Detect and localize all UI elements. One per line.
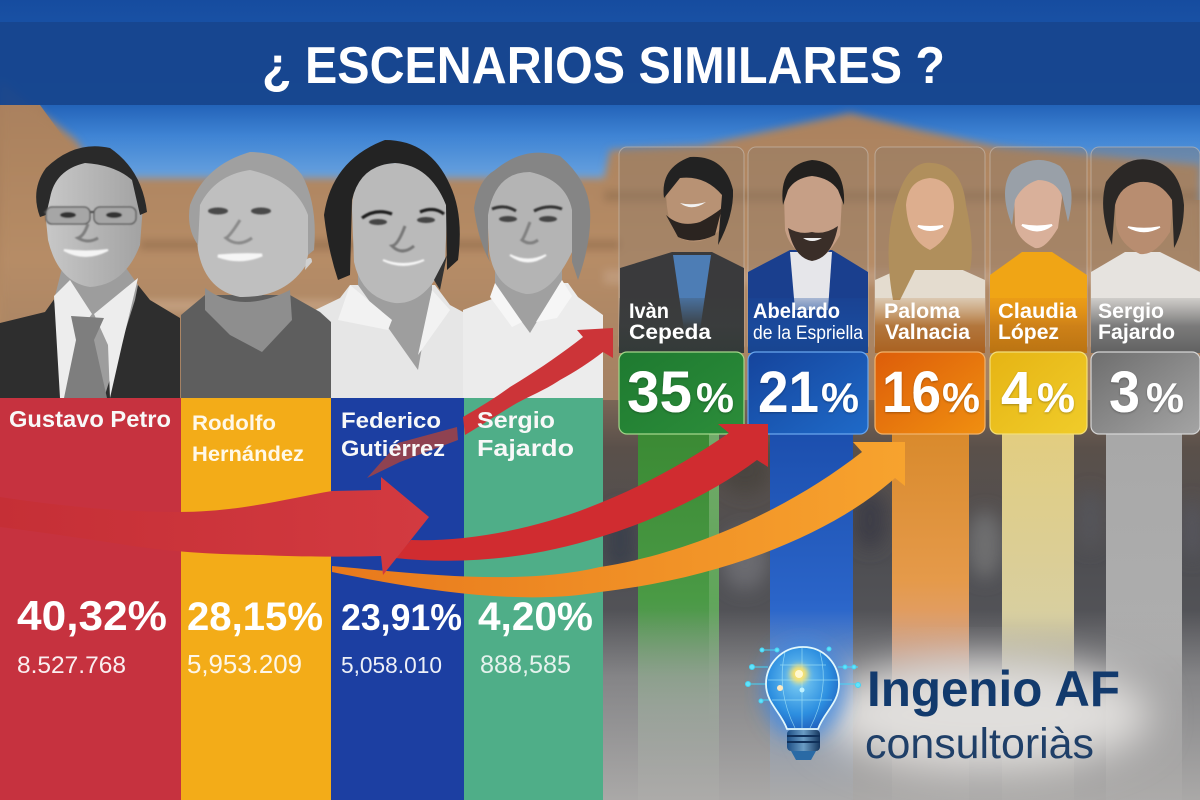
name: Paloma: [884, 300, 960, 323]
name: Sergio Fajardo: Fajardo: [477, 435, 574, 461]
portrait: Gustavo Petro: [0, 146, 180, 398]
percentage: 35: [627, 360, 692, 425]
percentage: %: [942, 374, 980, 421]
percentage: 16: [882, 360, 941, 425]
name: Sergio Fajardo: Sergio: [477, 407, 555, 433]
figures: Federico Gutiérrez: 5,058.010: [341, 652, 442, 678]
fog over the lower right: [603, 610, 1200, 800]
name: Valnacia: [885, 321, 970, 344]
logo: Ingenio AF consultorias: [746, 640, 1120, 768]
arrow: red flow to Abelardo de la Espriella: [395, 424, 768, 561]
title text: ¿ ESCENARIOS SIMILARES ?: [262, 37, 945, 95]
figures: Rodolfo Hernández: 28,15%: [187, 595, 323, 639]
name: Claudia: [998, 300, 1077, 323]
brand subtitle: consultoriàs: [865, 720, 1094, 768]
2022 vote figures: [17, 592, 593, 679]
figures: Rodolfo Hernández: 5,953.209: [187, 651, 302, 679]
name: López: [998, 321, 1059, 344]
portrait: Sergio Fajardo: [463, 153, 603, 398]
icon: light bulb: [746, 640, 860, 760]
portrait: Rodolfo Hernández: [181, 152, 331, 398]
name: Rodolfo Hernández: Rodolfo: [192, 412, 276, 435]
card: Sergio Fajardo 3%: [1091, 147, 1200, 434]
percentage: 21: [758, 360, 819, 425]
name: Fajardo: [1098, 321, 1175, 344]
name: Rodolfo Hernández: Hernández: [192, 443, 304, 466]
name: Sergio: [1098, 300, 1164, 323]
figures: Federico Gutiérrez: [341, 597, 462, 678]
arrow: orange flow to Paloma Valencia: [332, 442, 905, 597]
name: Federico Gutiérrez: Federico: [341, 408, 441, 433]
figures: Rodolfo Hernández: [187, 595, 323, 679]
brand name: Ingenio AF: [867, 661, 1120, 717]
candidate names, 2022: [9, 406, 574, 466]
figures: Sergio Fajardo: [478, 595, 593, 679]
percentage: %: [1037, 374, 1075, 421]
name: Ivàn: [629, 300, 669, 323]
figures: Sergio Fajardo: 888,585: [480, 651, 571, 679]
card: Claudia López 4%: [990, 147, 1087, 434]
name: Gustavo Petro: Gustavo Petro: [9, 406, 171, 432]
percentage: %: [1146, 374, 1184, 421]
arrow: thin red flow to Iván Cepeda: [367, 328, 613, 478]
percentage: 3: [1109, 360, 1140, 425]
percentage: 4: [1001, 360, 1032, 425]
card: Paloma Valencia 16%: [875, 147, 985, 434]
percentage: %: [696, 374, 734, 421]
portrait: Federico Gutiérrez: [311, 140, 463, 398]
name: Abelardo: [753, 300, 840, 323]
panel: 2022 candidate color columns: [0, 398, 603, 800]
name: Federico Gutiérrez: Gutiérrez: [341, 436, 445, 461]
figures: Sergio Fajardo: 4,20%: [478, 595, 593, 639]
vertical result bars under the cards: [638, 434, 1182, 800]
card: Abelardo de la Espriella 21%: [748, 147, 868, 434]
name: Cepeda: [629, 321, 711, 344]
arrow: large red arrow from Petro: [0, 477, 429, 575]
figures: Gustavo Petro: 40,32%: [17, 592, 167, 639]
figures: Gustavo Petro: [17, 592, 167, 679]
title banner: [0, 22, 1200, 105]
name: de la Espriella: [753, 323, 863, 344]
figures: Gustavo Petro: 8.527.768: [17, 652, 126, 679]
percentage: %: [821, 374, 859, 421]
figures: Federico Gutiérrez: 23,91%: [341, 597, 462, 638]
card: Iván Cepeda 35%: [619, 147, 744, 434]
